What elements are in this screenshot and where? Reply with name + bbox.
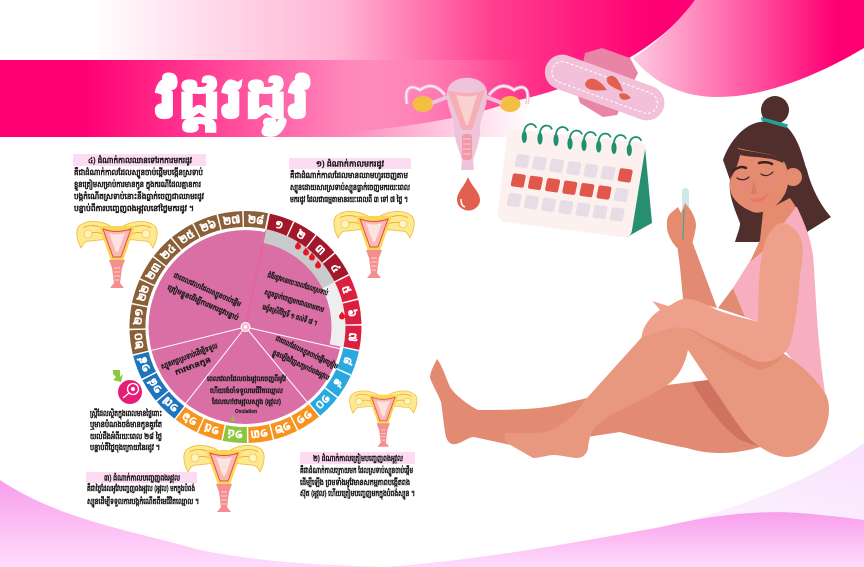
icon: green arrow: [113, 370, 123, 382]
illustration: calendar: [498, 124, 652, 237]
background: top pink swoosh: [60, 0, 695, 137]
flow arc: grey: [135, 217, 356, 437]
day numbers: ៩: [330, 376, 345, 390]
icon: egg and sperm badge: [118, 380, 142, 404]
title: វដ្តរដូវ: [155, 66, 310, 136]
ring: days 5-7: [118, 199, 373, 455]
belly: [718, 288, 745, 317]
wheel label: ovulation phase: ដែលហៅថាអូវុលស្យុង (អូវុល): [211, 397, 281, 408]
background: bottom left wave: [0, 480, 386, 567]
torso top: [733, 207, 825, 393]
face: [730, 148, 788, 213]
neck: [750, 198, 796, 262]
wheel label: menstruation phase: [261, 270, 330, 329]
centre flower: [241, 322, 250, 332]
wheel label: ovulation phase: [207, 374, 287, 415]
day numbers: ២៥: [177, 228, 197, 247]
day numbers: ២៧: [222, 214, 241, 228]
text block: phase 1: មករដូវ ដែលជាធម្មតាមានរយៈពេលពី ៣ ទៅ ៧ ថ្ងៃ ។: [290, 194, 408, 205]
hand and tampon: [667, 188, 696, 248]
day numbers: ១៥: [202, 420, 221, 437]
day numbers: ២៣: [144, 261, 164, 282]
fringe: [727, 148, 784, 178]
wheel label: menstruation phase: ស្បូនធ្លាក់ចេញមកជាឈាមតាម: [263, 287, 326, 316]
header: phase 4: [73, 154, 206, 166]
day numbers: ១៩: [136, 354, 153, 374]
day numbers: ១២: [273, 419, 293, 436]
text block: phase 1: ១) ដំណាក់កាលមករដូវ: [316, 158, 384, 170]
arm shadow: [687, 328, 783, 369]
day numbers: ១៨: [145, 375, 165, 396]
background: bottom pale swoosh: [386, 443, 864, 567]
day numbers: ៧: [346, 332, 358, 342]
nose: [751, 180, 757, 194]
day numbers: ២២: [136, 284, 152, 303]
header: phase 1: [289, 158, 411, 169]
hair back: [723, 121, 831, 242]
wheel label: ovulation phase: Ovulation: [235, 409, 257, 415]
background: bottom right wave: [386, 512, 864, 567]
text block: phase 4: ៤) ដំណាក់កាលឈានទៅរកការមករដូវ: [88, 155, 192, 166]
wheel label: follicular phase: ជាពេលដែលស្បូនចាប់ផ្តើមត្រៀម: [273, 334, 340, 373]
flow arc: pale: [135, 217, 356, 437]
header: phase 2: [300, 452, 415, 464]
lips: [750, 193, 769, 202]
raised forearm: [677, 241, 717, 308]
illustration: woman: [430, 96, 831, 458]
wheel label: menstruation phase: អេរ៉ូនស្រីពីថ្ងៃទី ១ ដល់ទី ៧ ។: [261, 302, 319, 329]
illustration: small uterus top left: [77, 221, 157, 288]
text block: phase 3: [86, 472, 199, 508]
text block: fertile note: យល់ដឹងអំពីរយៈពេល ២៨ ថ្ងៃ: [90, 431, 162, 442]
wheel label: fertile window: ការមានកូន: [174, 357, 213, 378]
text block: phase 4: បន្ទាប់ពីការបញ្ចេញពងអូវុលនៅថ្ងៃមករដូវ ។: [74, 203, 194, 214]
eyebrows and eyes: [733, 162, 773, 180]
hair bun: [761, 96, 789, 124]
wheel label: ovulation phase: ហើយរង់ចាំទទួលមេជីវិតឈ្មោល: [210, 386, 283, 396]
text block: fertile note: [90, 408, 162, 453]
day numbers: ១៤: [227, 427, 244, 440]
day numbers: ៦: [345, 308, 359, 318]
wheel label: fertile window: ស្បូនរក្សាស្រទាប់ដើម្បីទទួល: [159, 341, 220, 373]
text block: phase 4: [73, 154, 206, 214]
day numbers: ១: [273, 218, 285, 232]
day numbers: ២០: [132, 332, 146, 350]
day numbers: ៥: [339, 284, 353, 296]
icon: ovulation marker: [230, 415, 236, 421]
ring: days 17-19: [118, 199, 373, 455]
background: top right swoosh: [633, 0, 864, 97]
day numbers: ៣: [312, 242, 327, 258]
illustration: small uterus lower right: [350, 391, 417, 447]
illustration: reproductive organ: [406, 78, 528, 170]
day numbers: ១១: [294, 407, 314, 426]
text block: phase 2: ២) ដំណាក់កាលត្រៀមបញ្ចេញពងអូវុល: [313, 453, 403, 464]
ring: days 8-10: [118, 199, 373, 455]
cycle wheel: [118, 199, 373, 455]
back leg: [430, 359, 760, 453]
day numbers: ៤: [328, 262, 342, 275]
day numbers: ១០: [313, 391, 332, 411]
day numbers: [132, 213, 359, 440]
text block: phase 1: គឺជាដំណាក់កាលដែលមានឈាមហូរចេញតាម: [290, 170, 408, 181]
wheel label: follicular phase: ខ្លួនឡើងវិញសម្រាប់ពងអូវុល: [270, 348, 331, 384]
illustration: blood drop: [457, 177, 480, 210]
front thigh: [505, 327, 829, 458]
text block: phase 1: ស្បូនដោយសារស្រទាប់ស្បូនធ្លាក់ចេញមករយៈពេល: [290, 182, 410, 194]
ring: days 20-28: [118, 199, 373, 455]
ring: days 1-4: [118, 199, 373, 455]
text block: phase 2: ដើម្បីឡើង ព្រមទាំងអូវែមានសកម្មភាពបង្កើតពង: [300, 477, 410, 488]
text block: phase 4: ខ្លួនត្រៀមសម្រាប់ការមានកូន ក្នុងករណីដែលគ្មានការ: [74, 179, 201, 191]
arm: [642, 223, 803, 362]
wheel label: luteal phase: ជាពេលវេលាដែលស្បូនចាប់ផ្តើម: [171, 271, 243, 311]
day numbers: ៨: [340, 355, 355, 367]
text block: phase 2: គឺជាដំណាក់កាលក្រោយមក ដែលស្រទាប់ស្បូនចាប់ផ្តើម: [300, 465, 413, 477]
text block: phase 4: គឺជាដំណាក់កាលដែលស្បូនចាប់ផ្តើមបង្កើនស្រទាប់: [74, 167, 203, 179]
day numbers: ១៦: [180, 409, 200, 429]
day numbers: ២១: [132, 308, 146, 326]
sector lines: [150, 231, 341, 404]
blush: [736, 176, 776, 188]
text block: phase 3: គឺជាថ្ងៃដែលអូវែបញ្ចេញពងអូវុល (អូវុល) មកក្នុងបំពង់: [87, 483, 195, 495]
illustration: small uterus bottom: [184, 445, 264, 512]
blood drops: [295, 242, 345, 320]
text block: fertile note: បន្ទាប់ពីថ្ងៃចុងក្រោយនៃរដូវ ។: [90, 442, 160, 453]
day numbers: ២៤: [159, 243, 179, 263]
text block: phase 1: [289, 158, 411, 205]
text block: phase 3: ស្បូនដើម្បីទទួលការបង្កកំណើតពីមេជីវិតឈ្មោល ។: [87, 496, 199, 508]
leg shadow: [692, 380, 760, 447]
ring: day 14: [118, 199, 373, 455]
wheel disc: [148, 230, 342, 424]
day numbers: ១៧: [161, 394, 182, 414]
hair band: [762, 118, 787, 127]
text block: phase 2: [300, 452, 415, 500]
text block: phase 3: ៣) ដំណាក់កាលបញ្ចេញពងអូវុល: [104, 472, 180, 484]
ring: days 11-16: [118, 199, 373, 455]
day numbers: ២: [294, 228, 307, 243]
day numbers: ២៦: [199, 217, 218, 235]
header: phase 3: [86, 472, 197, 483]
text block: fertile note: ស្ត្រីដែលស្ថិតក្នុងពេលមានផ្ទៃពោះ: [90, 408, 162, 420]
text block: fertile note: ឬមានបំណងចង់មានកូនគួរតែ: [90, 419, 162, 430]
day numbers: ២៨: [247, 213, 265, 227]
text block: phase 2: ស៊ុត (អូវុល) ហើយត្រៀមបញ្ចេញមកក្នុងបំពង់ស្បូន ។: [300, 488, 415, 500]
wheel label: luteal phase: ត្រៀមខ្លួនដើម្បីការមករដូវបន្ទាប់: [165, 283, 241, 324]
wheel label: fertile window: [159, 341, 220, 378]
illustration: sanitary pad: [540, 48, 669, 125]
illustration: small uterus top right: [334, 211, 414, 278]
wheel label: menstruation phase: ជំងឺរដូវមានរយៈពេលដែលស្រទាប់: [266, 270, 330, 298]
day numbers: ១៣: [250, 426, 269, 440]
wheel label: follicular phase: [270, 334, 340, 384]
wheel label: ovulation phase: ពេលវេលាដែលពងអូវុលចេញពីអូវែ: [207, 374, 287, 384]
title band: [0, 60, 530, 137]
ear: [784, 168, 802, 186]
text block: phase 4: បង្កកំណើតស្រទាប់នោះនឹងធ្លាក់ចេញជាឈាមរដូវ: [74, 191, 204, 202]
